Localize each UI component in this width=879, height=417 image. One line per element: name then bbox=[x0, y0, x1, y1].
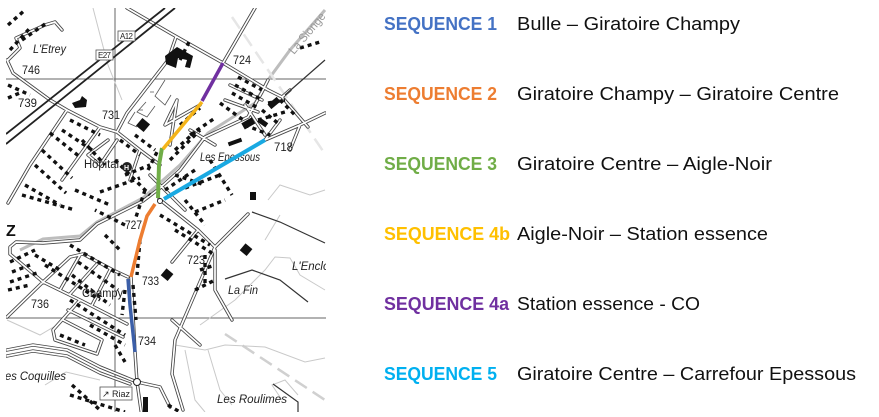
map labels: 724 bbox=[233, 55, 252, 67]
houses rows bbox=[8, 10, 320, 412]
route: sequence 1 blue bbox=[128, 279, 135, 352]
tracks and footpaths bbox=[225, 60, 325, 412]
legend row: sequence 2: SEQUENCE 2 bbox=[384, 84, 497, 104]
map labels: 733 bbox=[142, 276, 159, 288]
legend row: sequence 4b: Aigle-Noir – Station essence bbox=[517, 224, 768, 244]
map labels: La Sionge bbox=[286, 9, 329, 57]
map labels: La Fin bbox=[228, 285, 258, 297]
road sign: Riaz bbox=[100, 387, 132, 400]
rivers and contour lines bbox=[7, 8, 325, 412]
roads bbox=[7, 8, 325, 417]
map labels: 731 bbox=[102, 110, 120, 122]
legend row: sequence 5: SEQUENCE 5 bbox=[384, 364, 497, 384]
map labels: Les Roulimes bbox=[217, 394, 287, 406]
route: sequence 2 orange bbox=[131, 204, 155, 277]
map labels: Hôpital bbox=[84, 159, 119, 171]
legend bbox=[384, 14, 856, 384]
route: sequence 4b yellow bbox=[163, 102, 202, 149]
road sign: Riaz: ↗ Riaz bbox=[102, 389, 131, 399]
hospital marker: H bbox=[124, 165, 129, 172]
map labels: 746 bbox=[22, 65, 40, 77]
large buildings bbox=[72, 47, 281, 413]
legend row: sequence 4b: SEQUENCE 4b bbox=[384, 224, 510, 244]
panel: topographic map bbox=[5, 8, 335, 417]
road sign: E27 bbox=[96, 50, 113, 60]
route: sequence 5 cyan bbox=[164, 140, 265, 199]
map labels: Champy bbox=[82, 288, 123, 300]
map labels: 718 bbox=[274, 142, 293, 154]
legend row: sequence 4b bbox=[384, 224, 768, 244]
map labels: 727 bbox=[125, 220, 142, 232]
legend row: sequence 1 bbox=[384, 14, 740, 34]
map labels: 734 bbox=[138, 336, 157, 348]
legend row: sequence 3: SEQUENCE 3 bbox=[384, 154, 497, 174]
map labels: L'Etrey bbox=[33, 44, 67, 56]
legend row: sequence 4a: SEQUENCE 4a bbox=[384, 294, 510, 314]
legend row: sequence 1: SEQUENCE 1 bbox=[384, 14, 497, 34]
map grid lines bbox=[6, 8, 326, 412]
map labels bbox=[5, 9, 335, 406]
map labels: L'Enclos bbox=[292, 261, 335, 273]
map labels: Z bbox=[6, 223, 16, 240]
map labels: es Coquilles bbox=[5, 371, 66, 383]
legend row: sequence 5: Giratoire Centre – Carrefour Epessous bbox=[517, 364, 856, 384]
road sign: E27: E27 bbox=[98, 51, 112, 60]
legend row: sequence 5 bbox=[384, 364, 856, 384]
map labels: 739 bbox=[18, 98, 37, 110]
route: sequence 4a purple bbox=[202, 63, 223, 101]
map labels: 736 bbox=[31, 299, 49, 311]
hospital marker bbox=[122, 162, 132, 172]
motorway A12 / E27 bbox=[6, 8, 175, 144]
legend row: sequence 3 bbox=[384, 154, 772, 174]
map labels: 723 bbox=[187, 255, 205, 267]
legend row: sequence 2 bbox=[384, 84, 839, 104]
legend row: sequence 4a: Station essence - CO bbox=[517, 294, 700, 314]
plots near sports ground bbox=[128, 80, 171, 127]
map labels: Les Epessous bbox=[200, 152, 260, 164]
road sign: A12 bbox=[118, 31, 135, 41]
legend row: sequence 3: Giratoire Centre – Aigle-Noir bbox=[517, 154, 772, 174]
roundabouts bbox=[134, 198, 162, 386]
route: sequence 3 green bbox=[158, 148, 162, 198]
road sign: A12: A12 bbox=[120, 32, 134, 41]
legend row: sequence 2: Giratoire Champy – Giratoire Centre bbox=[517, 84, 839, 104]
legend row: sequence 1: Bulle – Giratoire Champy bbox=[517, 14, 740, 34]
legend row: sequence 4a bbox=[384, 294, 700, 314]
